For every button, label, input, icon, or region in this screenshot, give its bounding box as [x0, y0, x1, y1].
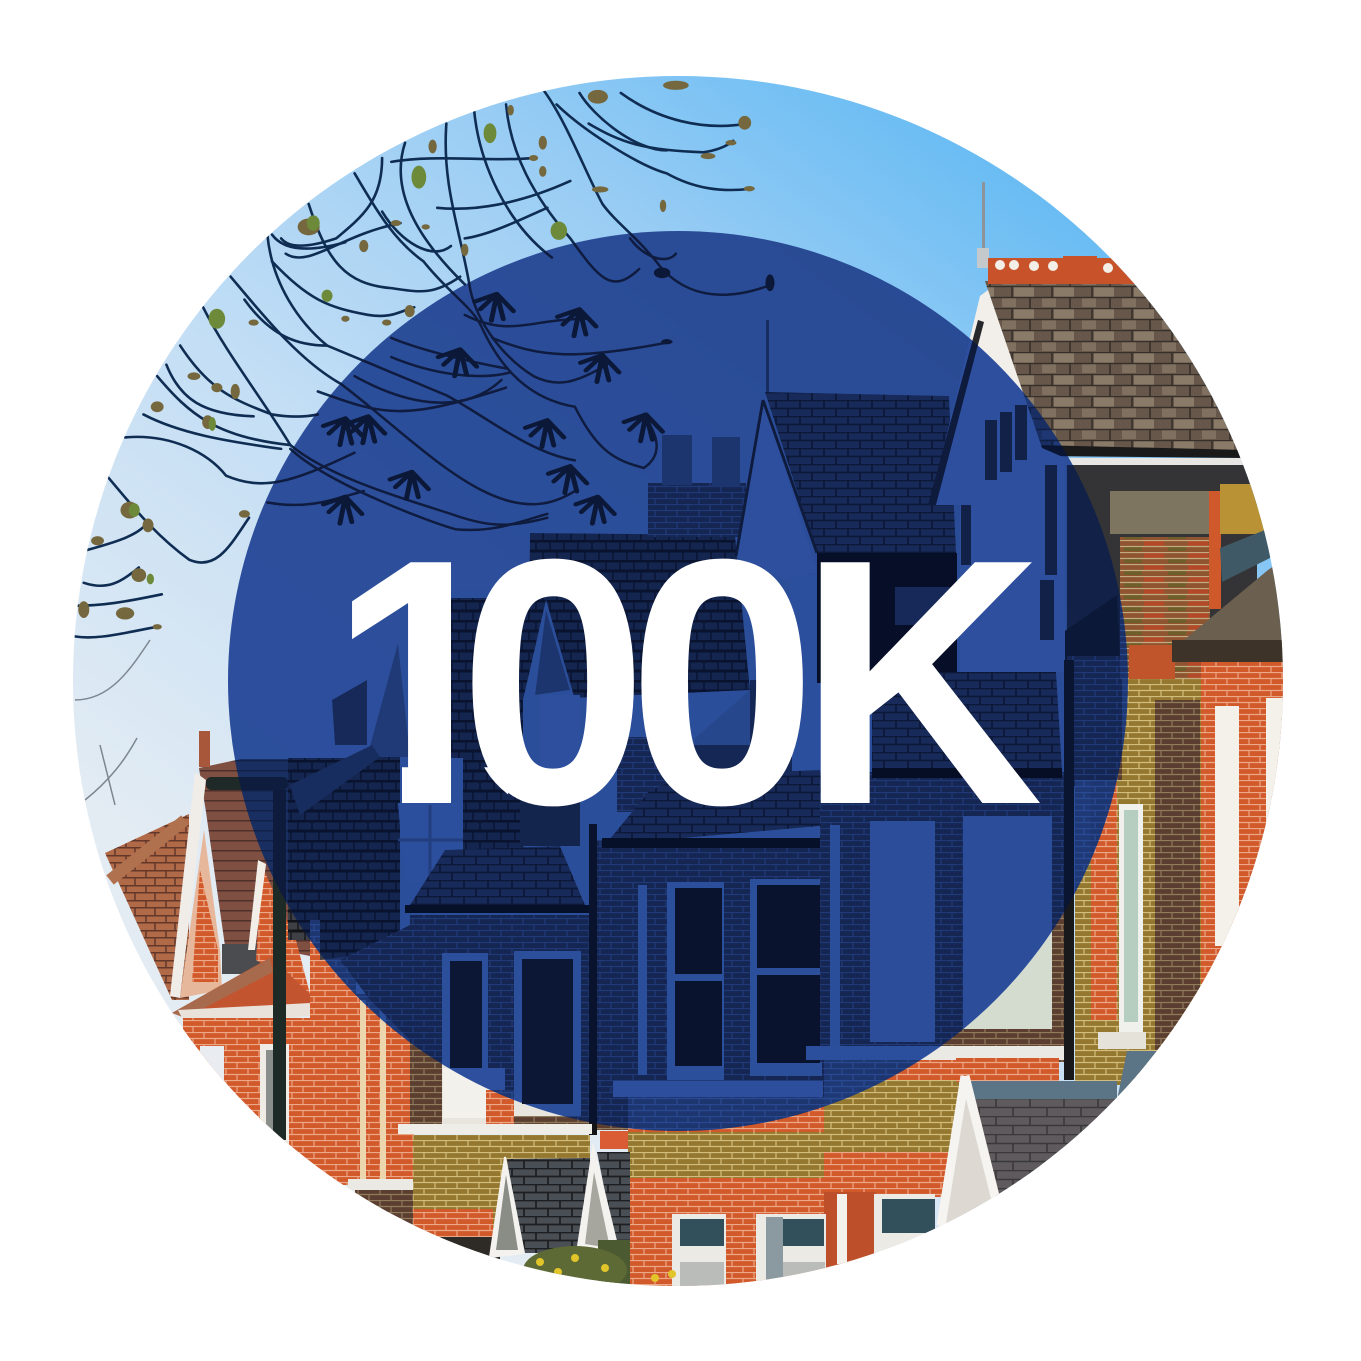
headline number: 100K — [329, 487, 1043, 878]
blue duotone disc over the photo — [228, 231, 1128, 1131]
